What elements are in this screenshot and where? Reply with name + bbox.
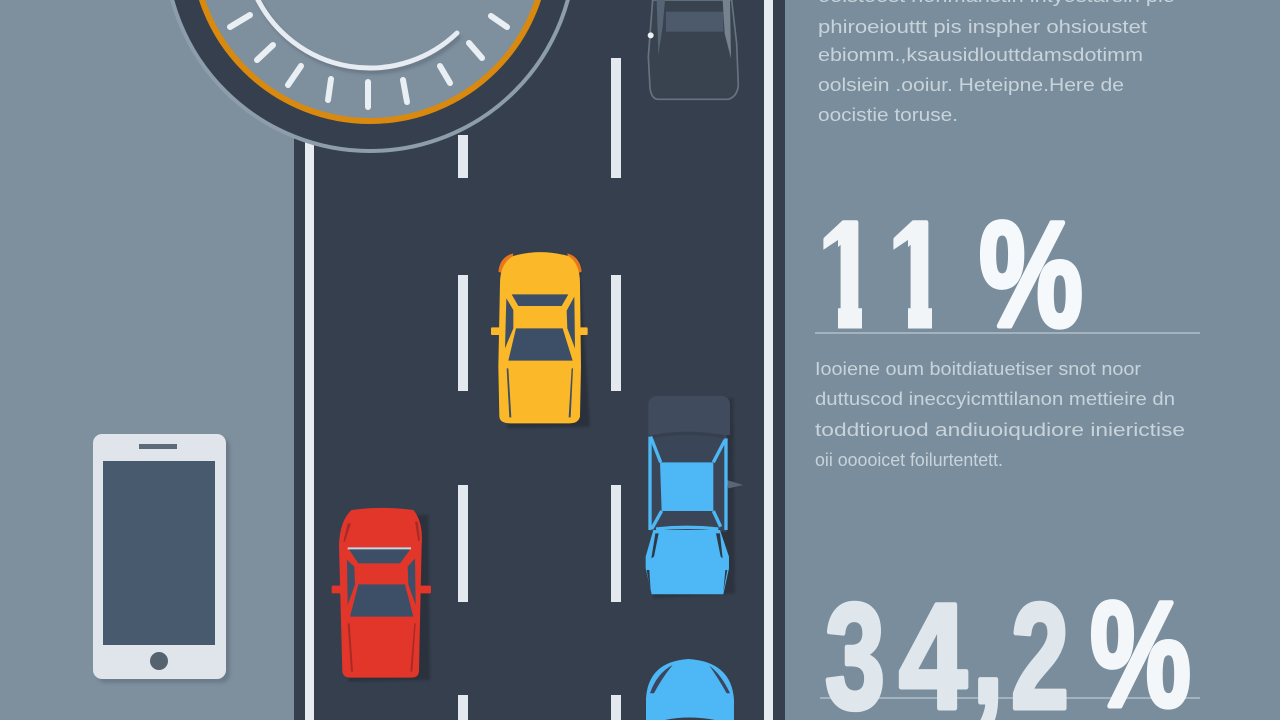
middle text block: oii ooooicet foilurtentett. [815, 450, 1003, 470]
top text block: oolsiein .ooiur. Heteipne.Here de [818, 75, 1124, 95]
statistic: 11 %: 1 [818, 190, 876, 358]
top text block: oocistie toruse. [818, 105, 958, 125]
middle text block [815, 359, 1185, 470]
blue car, bottom [646, 659, 734, 720]
red car [332, 508, 431, 682]
road [294, 0, 785, 720]
statistic: 11 % [823, 219, 1082, 330]
statistic: 11 %: 1 [888, 190, 946, 358]
divider under 11 % [815, 332, 1200, 334]
middle text block: Iooiene oum boitdiatuetiser snot noor [815, 359, 1141, 379]
smartphone icon [93, 434, 230, 683]
gauge needle arc [258, 0, 457, 68]
statistic: 11 %: % [979, 190, 1083, 358]
blue car, middle [646, 396, 743, 598]
yellow car [491, 252, 590, 428]
divider under 34,2 % [820, 697, 1200, 699]
statistic: 34,2 % [825, 566, 1191, 720]
top text block: phiroeiouttt pis inspher ohsioustet [818, 17, 1147, 37]
middle text block: toddtioruod andiuoiqudiore inierictise [815, 420, 1185, 440]
middle text block: duttuscod ineccyicmttilanon mettieire dn [815, 389, 1175, 409]
right panel [785, 0, 1280, 720]
gauge dial [165, 0, 575, 151]
gauge ticks [230, 15, 507, 107]
top text block: ebiomm.,ksausidlouttdamsdotimm [818, 45, 1143, 65]
ghost car at top of road [648, 0, 738, 99]
top text block [818, 0, 1175, 125]
